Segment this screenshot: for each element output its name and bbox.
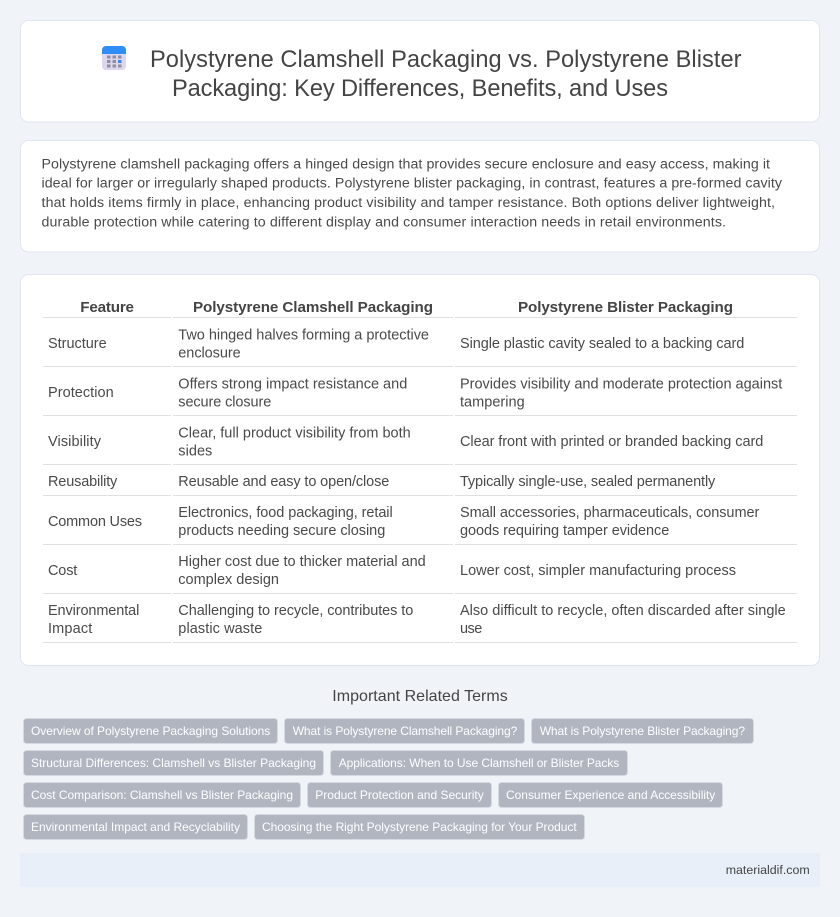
row: common uses: goods requiring tamper evidence <box>460 523 669 539</box>
row: common uses: Electronics, food packaging, retail <box>178 505 393 521</box>
row: cost <box>48 554 736 588</box>
tag: consumer experience: Consumer Experience and Accessibility <box>506 788 715 802</box>
row: common uses: products needing secure closing <box>178 523 385 539</box>
row: common uses: Small accessories, pharmaceuticals, consumer <box>460 505 759 521</box>
tag: choosing packaging <box>254 814 584 840</box>
row: protection: secure closure <box>178 394 271 410</box>
row: environmental impact: Also difficult to recycle, often discarded after single <box>460 603 786 619</box>
tag: applications: Applications: When to Use Clamshell or Blister Packs <box>339 756 619 770</box>
tag: overview <box>24 718 278 744</box>
panel: description <box>20 140 820 252</box>
row: protection: tampering <box>460 394 525 410</box>
row: reusability: Typically single-use, sealed permanently <box>460 474 716 490</box>
row: protection: Protection <box>48 385 114 401</box>
row: cost: Lower cost, simpler manufacturing process <box>460 563 736 579</box>
row: structure <box>48 327 744 361</box>
row: visibility: sides <box>178 443 212 459</box>
row: common uses <box>48 505 759 539</box>
header panel <box>20 20 820 122</box>
description text: ideal for larger or irregularly shaped products. Polystyrene blister packaging, in contrast, features a pre-formed cavity <box>42 176 783 192</box>
row: visibility <box>48 425 763 459</box>
row: cost: Cost <box>48 563 77 579</box>
row: structure: Two hinged halves forming a protective <box>178 327 429 343</box>
title: Polystyrene Clamshell Packaging vs. Polystyrene Blister <box>150 47 742 73</box>
row: protection: Offers strong impact resistance and <box>178 376 407 392</box>
row: structure: enclosure <box>178 345 241 361</box>
row: protection <box>48 376 782 410</box>
heading: important related terms: Important Related Terms <box>332 688 508 705</box>
row: cost: Higher cost due to thicker material and <box>178 554 426 570</box>
title: Packaging: Key Differences, Benefits, and Uses <box>172 76 668 102</box>
row: environmental impact: Impact <box>48 621 92 637</box>
tag: cost comparison <box>24 782 300 808</box>
row: reusability: Reusable and easy to open/close <box>178 474 389 490</box>
row: environmental impact: Challenging to recycle, contributes to <box>178 603 413 619</box>
tag: overview: Overview of Polystyrene Packaging Solutions <box>31 724 270 738</box>
row: visibility: Clear, full product visibility from both <box>178 425 411 441</box>
tag: structural differences <box>24 750 324 776</box>
tag: clamshell definition <box>284 718 524 744</box>
row: environmental impact: use <box>460 621 482 637</box>
description text: Polystyrene clamshell packaging offers a hinged design that provides secure enclosure and easy access, making it <box>42 156 770 172</box>
row: reusability <box>48 474 716 490</box>
tag: cost comparison: Cost Comparison: Clamshell vs Blister Packaging <box>31 788 293 802</box>
description text: durable protection while catering to different display and consumer interaction needs in retail environments. <box>42 214 726 230</box>
tag: applications <box>330 750 628 776</box>
row: common uses: Common Uses <box>48 514 142 530</box>
table header row: Polystyrene Blister Packaging <box>518 299 733 316</box>
footer <box>20 853 820 887</box>
tag: product protection <box>308 782 492 808</box>
tag: choosing packaging: Choosing the Right Polystyrene Packaging for Your Product <box>262 820 577 834</box>
tag: structural differences: Structural Differences: Clamshell vs Blister Packaging <box>31 756 316 770</box>
related terms tags <box>24 718 754 840</box>
row: environmental impact <box>48 603 786 637</box>
row: structure: Single plastic cavity sealed to a backing card <box>460 336 744 352</box>
tag: blister definition <box>532 718 754 744</box>
row: visibility: Clear front with printed or branded backing card <box>460 434 763 450</box>
tag: blister definition: What is Polystyrene Blister Packaging? <box>540 724 745 738</box>
table header row: Polystyrene Clamshell Packaging <box>193 299 433 316</box>
table header row <box>80 299 733 316</box>
row: visibility: Visibility <box>48 434 102 450</box>
description text <box>42 156 783 230</box>
row: environmental impact: plastic waste <box>178 621 262 637</box>
row: environmental impact: Environmental <box>48 603 139 619</box>
row: protection: Provides visibility and moderate protection against <box>460 376 782 392</box>
title <box>150 47 742 102</box>
row: cost: complex design <box>178 572 279 588</box>
icon: calendar <box>102 46 126 70</box>
tag: consumer experience <box>498 782 722 808</box>
row: reusability: Reusability <box>48 474 118 490</box>
panel: comparison table <box>20 274 820 666</box>
footer source text: materialdif.com <box>726 863 810 877</box>
tag: product protection: Product Protection and Security <box>315 788 484 802</box>
description text: that holds items firmly in place, enhancing product visibility and tamper resistance. Both options deliver lightweight, <box>42 195 775 211</box>
row: structure: Structure <box>48 336 107 352</box>
tag: environmental impact <box>24 814 248 840</box>
tag: clamshell definition: What is Polystyrene Clamshell Packaging? <box>293 724 518 738</box>
table header row: Feature <box>80 299 134 316</box>
tag: environmental impact: Environmental Impact and Recyclability <box>31 820 240 834</box>
